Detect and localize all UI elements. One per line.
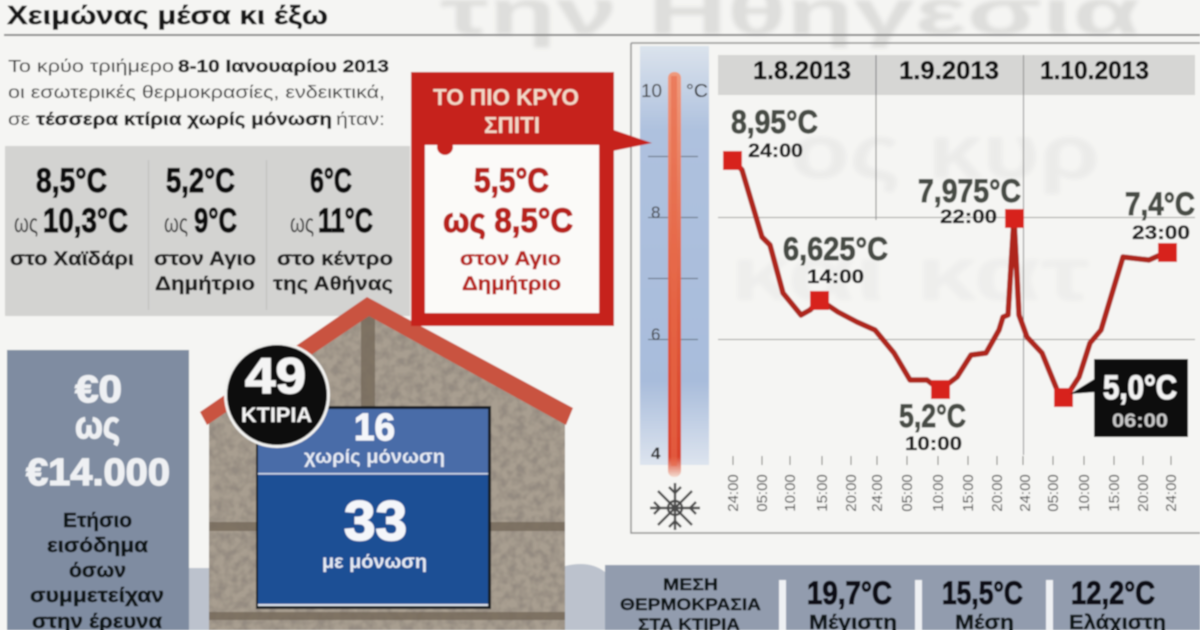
- x-axis hour labels: 10:00: [782, 474, 799, 512]
- Athens centre temperatures: 6°C: [310, 162, 352, 200]
- x-axis hour labels: 20:00: [1135, 474, 1152, 512]
- thermometer scale: 8: [651, 203, 660, 222]
- house roof: [200, 297, 573, 425]
- intro text block: Το κρύο τριήμερο: [8, 56, 174, 76]
- intro text block: τέσσερα κτίρια χωρίς μόνωση: [36, 109, 332, 129]
- background hills behind the house: [189, 564, 605, 630]
- panel: income: ως: [75, 405, 120, 447]
- data label: 5.2: [899, 398, 966, 455]
- data points: [723, 151, 1177, 407]
- thermometer scale: 4: [651, 444, 661, 463]
- Athens centre temperatures: ως: [290, 208, 314, 238]
- data label: 6.625: 14:00: [807, 267, 864, 288]
- Agios Dimitrios temperatures: 5,2°C: [166, 162, 235, 200]
- Athens centre temperatures: της Αθήνας: [273, 274, 393, 295]
- Agios Dimitrios temperatures: Δημήτριο: [155, 274, 255, 295]
- intro text block: ήταν:: [336, 109, 385, 129]
- callout: coldest house: 5,5°C: [474, 162, 549, 200]
- chart: temperature over time: [631, 43, 1200, 533]
- x-axis hour labels: 05:00: [754, 474, 771, 512]
- badge: 49 buildings: [224, 342, 330, 448]
- x-axis hour labels: 24:00: [1017, 474, 1034, 512]
- temperature line: [733, 160, 1167, 397]
- Haidari temperatures: 10,3°C: [43, 202, 128, 240]
- panel: average temperature in buildings: ΘΕΡΜΟΚΡΑΣΙΑ: [620, 595, 761, 614]
- callout: coldest house: ΣΠΙΤΙ: [484, 112, 540, 138]
- callout: coldest house: στον Αγιο: [460, 249, 561, 270]
- x-axis hour labels: 10:00: [930, 474, 947, 512]
- callout: coldest house: Δημήτριο: [462, 274, 561, 295]
- x-axis hour labels: 10:00: [1076, 474, 1093, 512]
- callout: coldest house: [411, 72, 652, 326]
- panel: average temperature in buildings: 15,5°C: [942, 575, 1023, 611]
- badge: 49 buildings: 49: [245, 348, 306, 404]
- data label: 6.625: [783, 231, 888, 288]
- x-axis hour labels: 24:00: [725, 474, 742, 512]
- show-through text from the reverse page: και κατ: [730, 232, 1090, 317]
- data label: 8.95: 8,95°C: [731, 104, 818, 140]
- x-axis hour labels: 24:00: [869, 474, 886, 512]
- panel: income: [7, 350, 189, 630]
- intro text block: σε: [8, 109, 30, 129]
- panel: income: Ετήσιο: [63, 510, 132, 532]
- Athens centre temperatures: [273, 162, 393, 295]
- Athens centre temperatures: 11°C: [318, 202, 373, 240]
- date header band: 1.9.2013: [899, 57, 999, 85]
- panel: income: €14.000: [26, 452, 170, 494]
- Haidari temperatures: 8,5°C: [36, 162, 107, 200]
- intro text block: 8-10 Ιανουαρίου 2013: [178, 56, 389, 76]
- Agios Dimitrios temperatures: [154, 162, 256, 295]
- x-axis hour labels: 15:00: [1106, 474, 1123, 512]
- data label: 5.2: 10:00: [905, 434, 962, 455]
- thermometer scale: 10: [641, 81, 662, 101]
- x-axis ticks: [733, 456, 1171, 465]
- Agios Dimitrios temperatures: 9°C: [194, 202, 237, 240]
- Agios Dimitrios temperatures: στον Αγιο: [154, 249, 256, 270]
- data label: 8.95: 24:00: [748, 141, 803, 162]
- panel: average temperature in buildings: 19,7°C: [807, 575, 892, 611]
- panel: average temperature in buildings: [605, 565, 1200, 630]
- intro text block: οι εσωτερικές θερμοκρασίες, ενδεικτικά,: [8, 82, 385, 102]
- house walls: [209, 312, 565, 630]
- x-axis hour labels: 24:00: [1163, 474, 1180, 512]
- thermometer scale: °C: [686, 81, 708, 101]
- x-axis hour labels: 15:00: [960, 474, 977, 512]
- panel: income: συμμετείχαν: [30, 585, 164, 607]
- panel: income: εισόδημα: [47, 535, 149, 557]
- thermometer scale: [640, 46, 709, 477]
- Haidari temperatures: [10, 162, 134, 270]
- Haidari temperatures: στο Χαϊδάρι: [10, 249, 134, 270]
- panel: temperatures in buildings: [5, 146, 410, 316]
- panel: building counts: 16: [354, 407, 395, 449]
- panel: income: €0: [75, 369, 122, 411]
- data label: 7.4: 23:00: [1132, 223, 1190, 244]
- x-axis hour labels: 05:00: [899, 474, 916, 512]
- data label: 7.975: 22:00: [940, 207, 997, 228]
- data label: 7.975: [918, 173, 1021, 228]
- panel: building counts: [256, 406, 491, 609]
- thermometer scale: 6: [651, 325, 660, 344]
- title: Χειμώνας μέσα κι έξω: [7, 0, 328, 30]
- callout: minimum 5.0: 5,0°C: [1103, 369, 1177, 407]
- badge: 49 buildings: ΚΤΙΡΙΑ: [241, 404, 312, 427]
- data label: 7.975: 7,975°C: [918, 173, 1021, 209]
- panel: building counts: με μόνωση: [322, 552, 427, 573]
- panel: income: όσων: [69, 560, 126, 582]
- wall timbers: [209, 314, 565, 620]
- icon: snowflake: [650, 483, 700, 530]
- date header band: 1.10.2013: [1040, 57, 1149, 85]
- show-through text from the reverse page: ος κυρ: [790, 110, 1100, 195]
- x-axis hour labels: 20:00: [843, 474, 860, 512]
- Athens centre temperatures: στο κέντρο: [277, 249, 393, 270]
- data label: 7.4: [1125, 186, 1195, 244]
- x-axis hour labels: 05:00: [1045, 474, 1062, 512]
- chart frame: [631, 43, 1200, 533]
- panel: average temperature in buildings: ΜΕΣΗ: [663, 575, 718, 594]
- date header band: 1.8.2013: [753, 57, 851, 85]
- panel: average temperature in buildings: 12,2°C: [1071, 575, 1155, 611]
- Haidari temperatures: ως: [14, 208, 38, 238]
- show-through text from the reverse page: [440, 0, 1140, 317]
- x-axis hour labels: 15:00: [814, 474, 831, 512]
- callout: coldest house: ως 8,5°C: [443, 202, 573, 240]
- house illustration: [200, 297, 573, 630]
- data label: 5.2: 5,2°C: [899, 398, 966, 434]
- callout: minimum 5.0: 06:00: [1112, 411, 1168, 432]
- panel: building counts: 33: [344, 489, 407, 552]
- panel: building counts: χωρίς μόνωση: [304, 447, 445, 468]
- date header band: [718, 55, 1195, 95]
- x-axis hour labels: [725, 474, 1180, 512]
- data label: 6.625: 6,625°C: [783, 231, 888, 267]
- intro text block: [8, 56, 389, 129]
- Agios Dimitrios temperatures: ως: [164, 208, 188, 238]
- x-axis hour labels: 20:00: [989, 474, 1006, 512]
- callout: coldest house: ΤΟ ΠΙΟ ΚΡΥΟ: [433, 84, 579, 110]
- data label: 8.95: [731, 104, 818, 162]
- callout: minimum 5.0: [1070, 359, 1188, 437]
